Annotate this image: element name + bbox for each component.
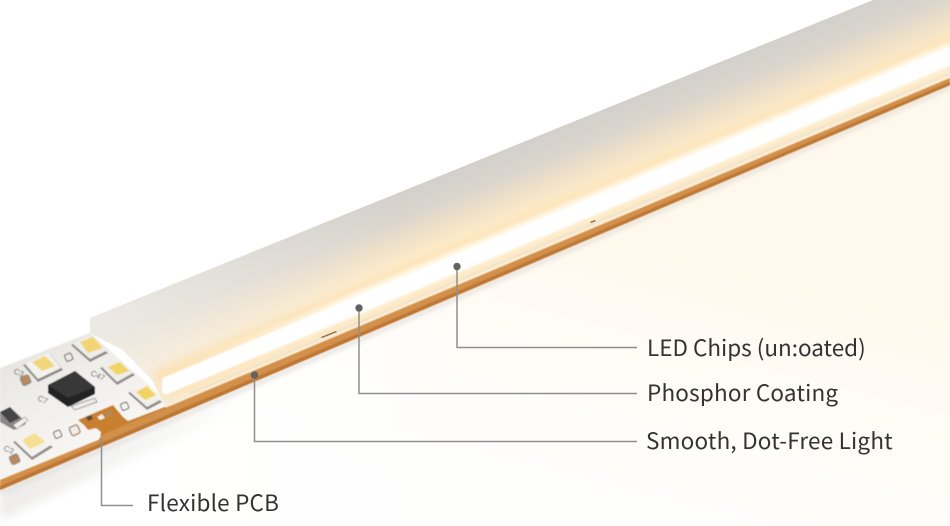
small parts: C7 xyxy=(36,394,50,406)
flexible PCB board xyxy=(0,333,170,482)
label: LED Chips: LED Chips (un:oated) xyxy=(647,331,866,363)
small parts xyxy=(2,353,129,465)
LED chip cluster xyxy=(13,336,162,460)
small parts: C3 xyxy=(12,367,26,379)
label: Flexible PCB: Flexible PCB xyxy=(147,486,279,518)
label: Smooth, Dot-Free Light: Smooth, Dot-Free Light xyxy=(646,424,893,456)
callout: Flexible PCB xyxy=(102,438,279,518)
callout: Smooth, Dot-Free Light xyxy=(251,371,893,456)
copper pad xyxy=(78,405,170,445)
label: Phosphor Coating: Phosphor Coating xyxy=(647,376,838,408)
tactile component xyxy=(0,407,28,430)
diffuser xyxy=(90,0,950,408)
IC chip xyxy=(48,371,97,410)
copper edge xyxy=(0,78,950,496)
light band xyxy=(162,42,950,395)
callout: Phosphor Coating xyxy=(355,304,838,408)
small parts: C47 xyxy=(89,369,107,383)
small parts: C3 xyxy=(2,444,16,456)
callout: LED Chips xyxy=(453,263,866,363)
